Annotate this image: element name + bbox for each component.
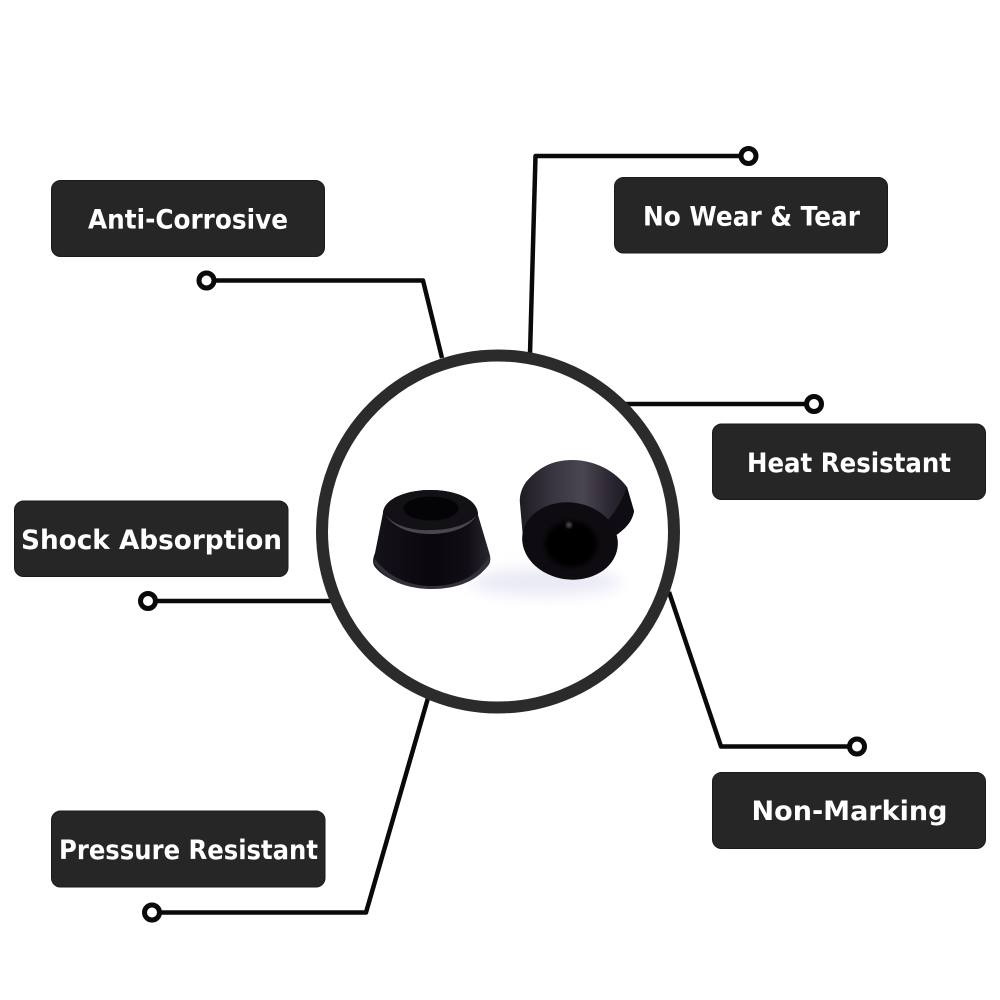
connector: Pressure Resistant <box>144 698 428 920</box>
label: Non-Marking: Non-Marking <box>752 796 948 827</box>
label: Pressure Resistant <box>52 811 325 887</box>
label: Heat Resistant: Heat Resistant <box>747 448 951 479</box>
label: Anti-Corrosive <box>52 180 324 256</box>
label: Heat Resistant <box>712 424 986 500</box>
shadows <box>470 568 620 596</box>
label: Anti-Corrosive: Anti-Corrosive <box>88 204 288 236</box>
central product circle <box>322 356 674 708</box>
label: Shock Absorption: Shock Absorption <box>21 525 282 556</box>
label: No Wear & Tear: No Wear & Tear <box>643 202 861 232</box>
label: Shock Absorption <box>14 501 288 576</box>
connector: Anti-Corrosive <box>199 273 442 358</box>
product photo: two black rubber feet <box>373 460 634 596</box>
label: Pressure Resistant: Pressure Resistant <box>59 835 318 866</box>
connector: No Wear & Tear <box>530 148 756 354</box>
left rubber foot <box>373 490 490 589</box>
connector: Shock Absorption <box>140 594 331 608</box>
label: Non-Marking <box>712 772 986 848</box>
connector: Non-Marking <box>669 592 864 754</box>
connector: Heat Resistant <box>625 396 822 412</box>
right rubber foot <box>517 460 634 586</box>
label: No Wear & Tear <box>614 178 888 253</box>
